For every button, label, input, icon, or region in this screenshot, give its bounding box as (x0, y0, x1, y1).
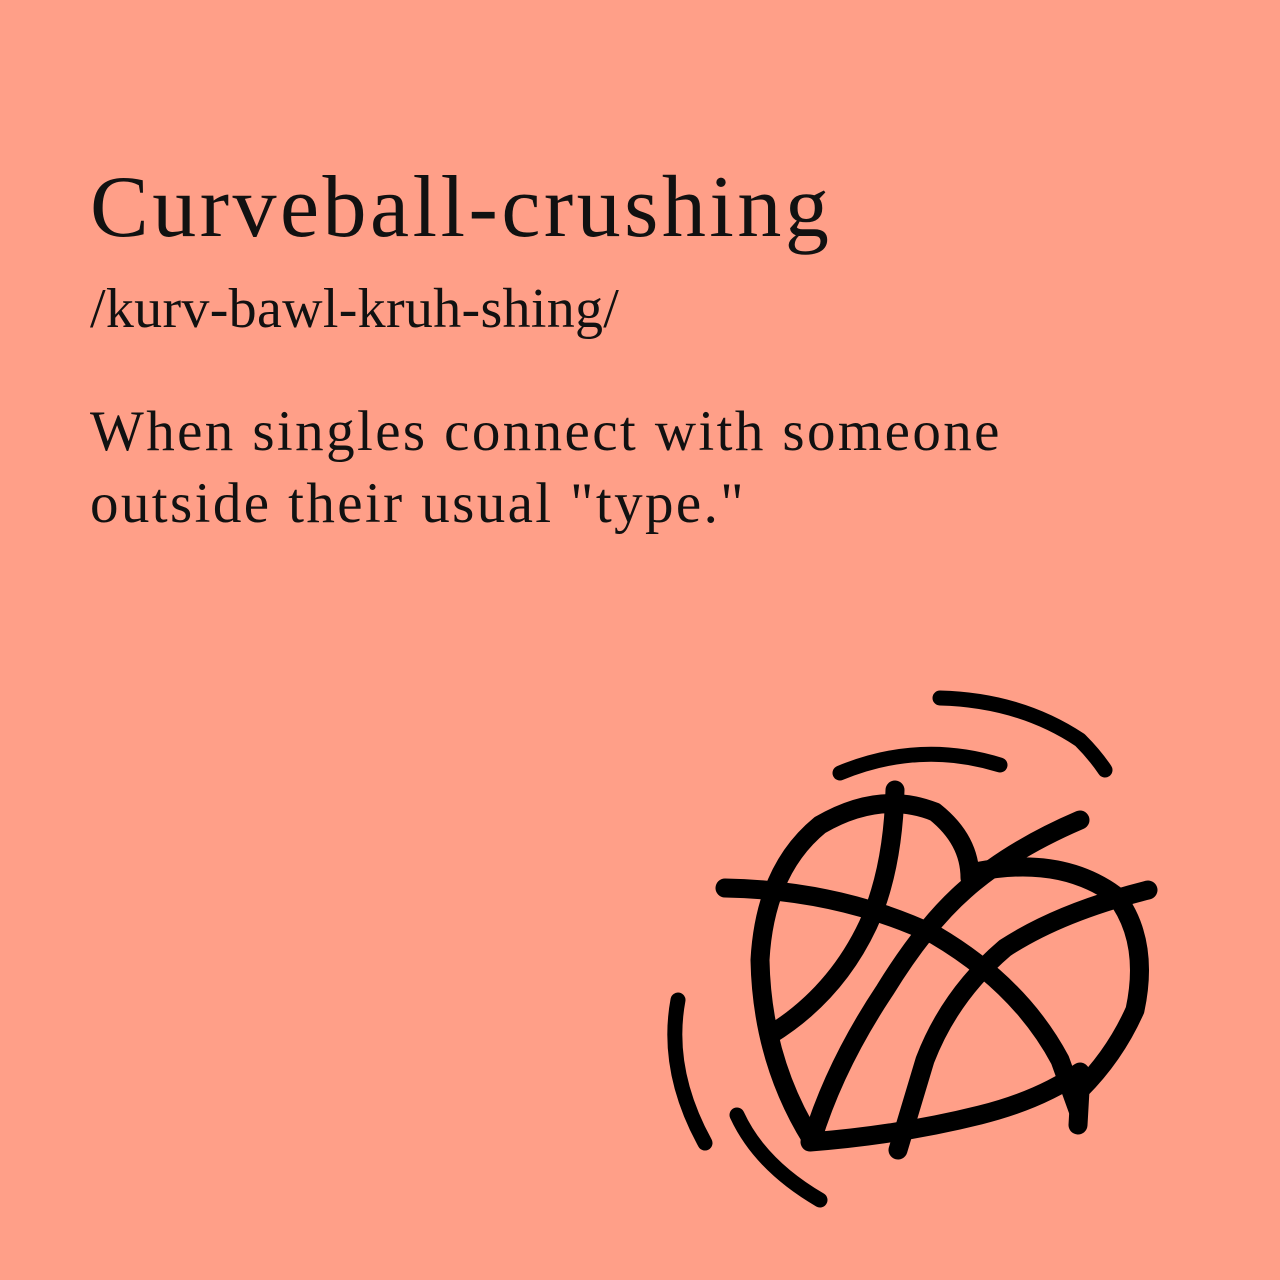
title: Curveball-crushing (90, 159, 832, 256)
definition text: outside their usual "type." (90, 472, 746, 535)
definition text: When singles connect with someone (90, 400, 1002, 463)
pronunciation: /kurv-bawl-kruh-shing/ (90, 278, 619, 340)
heart outline (725, 790, 1148, 1150)
definition text (90, 400, 1002, 535)
ball seams (725, 888, 1078, 1110)
motion swooshes (675, 698, 1105, 1200)
